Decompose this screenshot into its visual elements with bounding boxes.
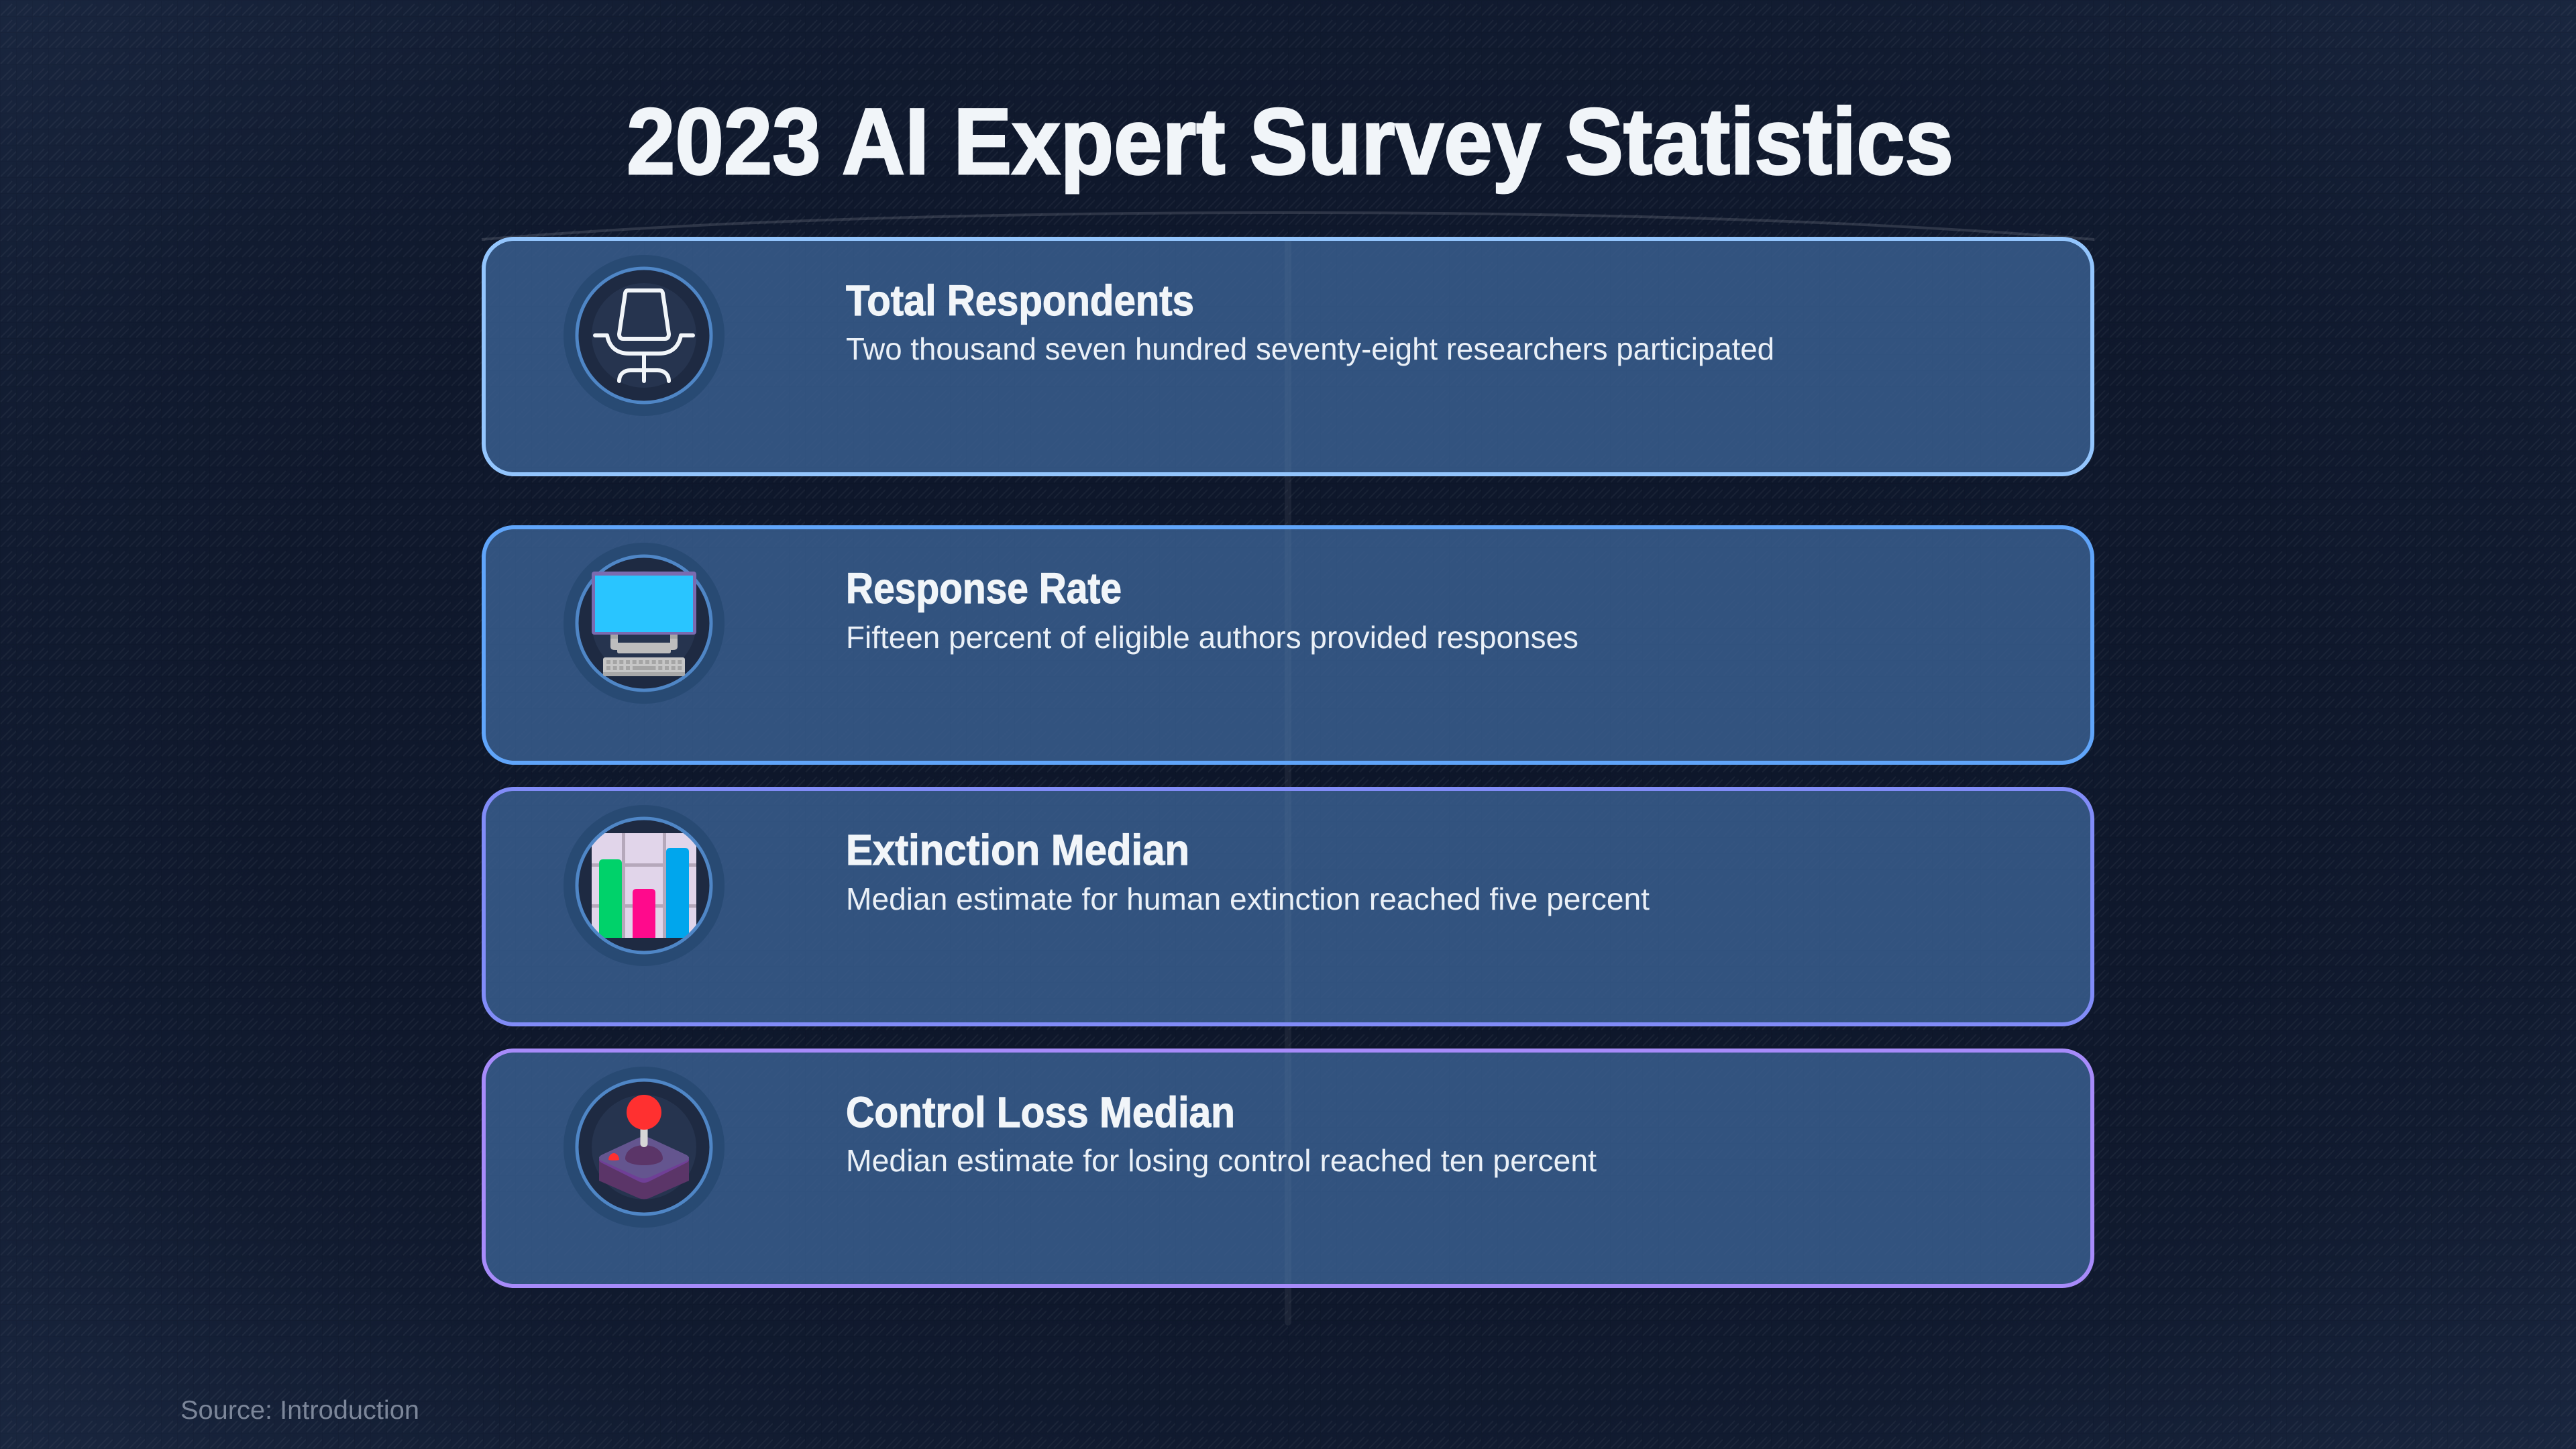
- icon: bar chart: [564, 805, 724, 966]
- description: response rate: Fifteen percent of eligible authors provided responses: [846, 620, 1578, 655]
- top arc line: [482, 213, 2094, 239]
- icon: joystick: [564, 1067, 724, 1228]
- heading: total respondents: Total Respondents: [846, 276, 1194, 325]
- panel: total respondents: [484, 239, 2092, 474]
- panel: response rate: [484, 527, 2092, 763]
- title: 2023 AI Expert Survey Statistics: [627, 89, 1953, 194]
- source note: Source: Introduction: [180, 1396, 419, 1425]
- central vertical line: [1285, 237, 1291, 1326]
- description: total respondents: Two thousand seven hundred seventy-eight researchers participated: [846, 331, 1774, 366]
- icon: office chair: [564, 255, 724, 416]
- panel: extinction median: [484, 789, 2092, 1024]
- heading: extinction median: Extinction Median: [846, 826, 1189, 874]
- panel: control loss median: [484, 1051, 2092, 1286]
- heading: control loss median: Control Loss Median: [846, 1088, 1235, 1136]
- description: control loss median: Median estimate for losing control reached ten percent: [846, 1143, 1597, 1178]
- description: extinction median: Median estimate for human extinction reached five percent: [846, 881, 1650, 916]
- icon: desktop computer: [564, 543, 724, 704]
- heading: response rate: Response Rate: [846, 564, 1122, 612]
